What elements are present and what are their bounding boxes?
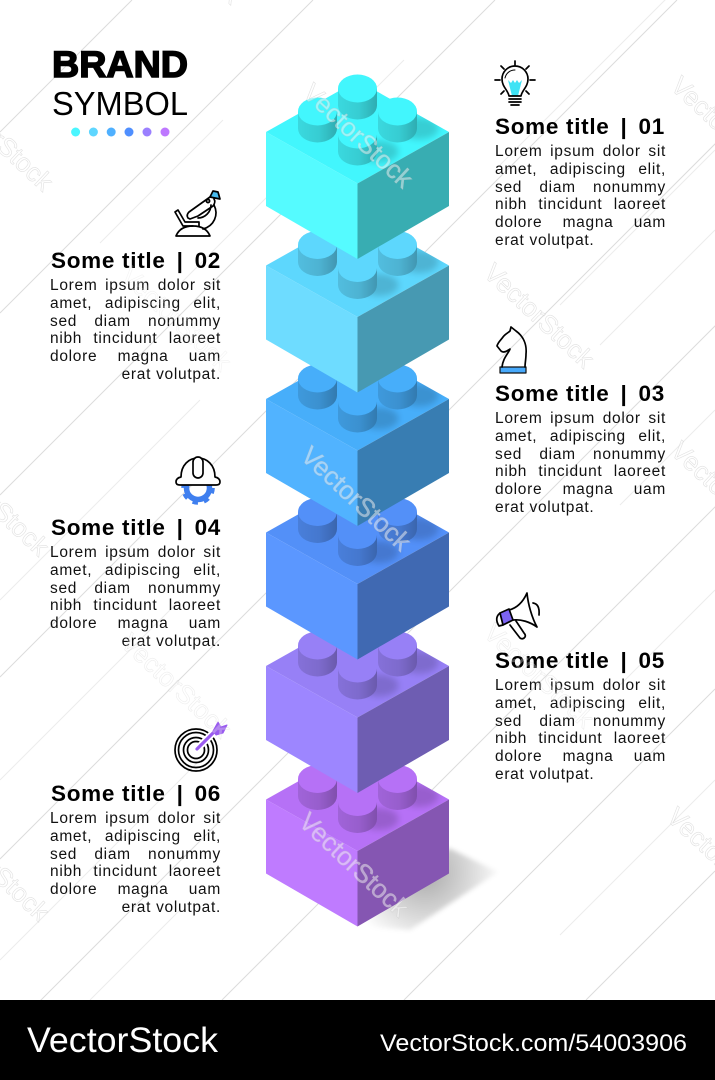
text 06: erat volutpat. <box>122 899 221 916</box>
text 06: amet, adipiscing elit, <box>50 828 221 845</box>
panel 02 <box>50 190 221 383</box>
watermark overlay: VectorStock <box>115 260 238 377</box>
text 03: Lorem ipsum dolor sit <box>495 410 666 427</box>
panel 03 <box>495 326 666 516</box>
text 04: Lorem ipsum dolor sit <box>50 544 221 561</box>
text 04: erat volutpat. <box>122 633 221 650</box>
icon: helmet and gear <box>175 456 221 505</box>
icon: target and arrow <box>174 722 228 772</box>
text 05: sed diam nonummy <box>495 713 666 730</box>
text 04: sed diam nonummy <box>50 580 221 597</box>
text 04 <box>50 544 221 650</box>
icon: light bulb <box>494 60 536 106</box>
colour dots <box>71 128 170 136</box>
footer image id: VectorStock.com/54003906 <box>380 1030 687 1057</box>
title 03: Some title | 03 <box>495 381 665 406</box>
title 05: Some title | 05 <box>495 648 665 673</box>
text 03: sed diam nonummy <box>495 446 666 463</box>
footer logo text: VectorStock <box>27 1021 219 1060</box>
text 02 <box>50 277 221 383</box>
panel 04 <box>50 456 221 650</box>
title 06: Some title | 06 <box>51 781 221 806</box>
text 06: sed diam nonummy <box>50 846 221 863</box>
watermark overlay: VectorStock <box>295 440 418 557</box>
icon: chess knight <box>496 326 527 374</box>
text 06: dolore magna uam <box>50 881 221 898</box>
text 05: nibh tincidunt laoreet <box>495 730 666 747</box>
watermark overlay: VectorStock <box>478 617 601 734</box>
text 03 <box>495 410 666 516</box>
brick 2: light blue <box>266 208 449 392</box>
watermark overlay: VectorStock <box>478 257 601 374</box>
text 02: erat volutpat. <box>122 366 221 383</box>
text 01 <box>495 143 666 249</box>
text 03: nibh tincidunt laoreet <box>495 463 666 480</box>
watermark overlay: VectorStock <box>293 806 416 923</box>
text 04: amet, adipiscing elit, <box>50 562 221 579</box>
brick 3: sky blue <box>266 342 449 526</box>
text 04: dolore magna uam <box>50 615 221 632</box>
brick 5: purple <box>266 608 449 793</box>
text 01: Lorem ipsum dolor sit <box>495 143 666 160</box>
text 01: erat volutpat. <box>495 232 594 249</box>
text 06 <box>50 810 221 916</box>
text 04: nibh tincidunt laoreet <box>50 597 221 614</box>
icon: microscope <box>174 190 221 237</box>
ground shadow under tower <box>357 848 498 930</box>
brand word: BRAND <box>52 44 188 85</box>
title 01: Some title | 01 <box>495 114 665 139</box>
text 03: erat volutpat. <box>495 499 594 516</box>
text 02: dolore magna uam <box>50 348 221 365</box>
title 04: Some title | 04 <box>51 515 221 540</box>
text 05 <box>495 677 666 783</box>
text 03: amet, adipiscing elit, <box>495 428 666 445</box>
brick 1: cyan <box>266 74 449 259</box>
text 05: amet, adipiscing elit, <box>495 695 666 712</box>
text 01: nibh tincidunt laoreet <box>495 196 666 213</box>
panel 06 <box>50 722 228 916</box>
text 02: amet, adipiscing elit, <box>50 295 221 312</box>
panel 05 <box>495 592 666 783</box>
watermark overlay: VectorStock <box>115 627 238 744</box>
text 01: amet, adipiscing elit, <box>495 161 666 178</box>
text 03: dolore magna uam <box>495 481 666 498</box>
brick 6: violet <box>266 742 449 926</box>
text 02: sed diam nonummy <box>50 313 221 330</box>
panel 01 <box>494 60 666 249</box>
text 05: Lorem ipsum dolor sit <box>495 677 666 694</box>
icon: megaphone <box>496 592 540 640</box>
text 06: nibh tincidunt laoreet <box>50 863 221 880</box>
text 01: sed diam nonummy <box>495 179 666 196</box>
brick 4: blue <box>266 475 449 660</box>
title 02: Some title | 02 <box>51 248 221 273</box>
text 02: Lorem ipsum dolor sit <box>50 277 221 294</box>
text 05: dolore magna uam <box>495 748 666 765</box>
text 06: Lorem ipsum dolor sit <box>50 810 221 827</box>
watermark overlay: VectorStock <box>297 77 420 194</box>
footer bar <box>0 1000 715 1080</box>
symbol word: SYMBOL <box>52 85 188 122</box>
text 01: dolore magna uam <box>495 214 666 231</box>
text 05: erat volutpat. <box>495 766 594 783</box>
text 02: nibh tincidunt laoreet <box>50 330 221 347</box>
